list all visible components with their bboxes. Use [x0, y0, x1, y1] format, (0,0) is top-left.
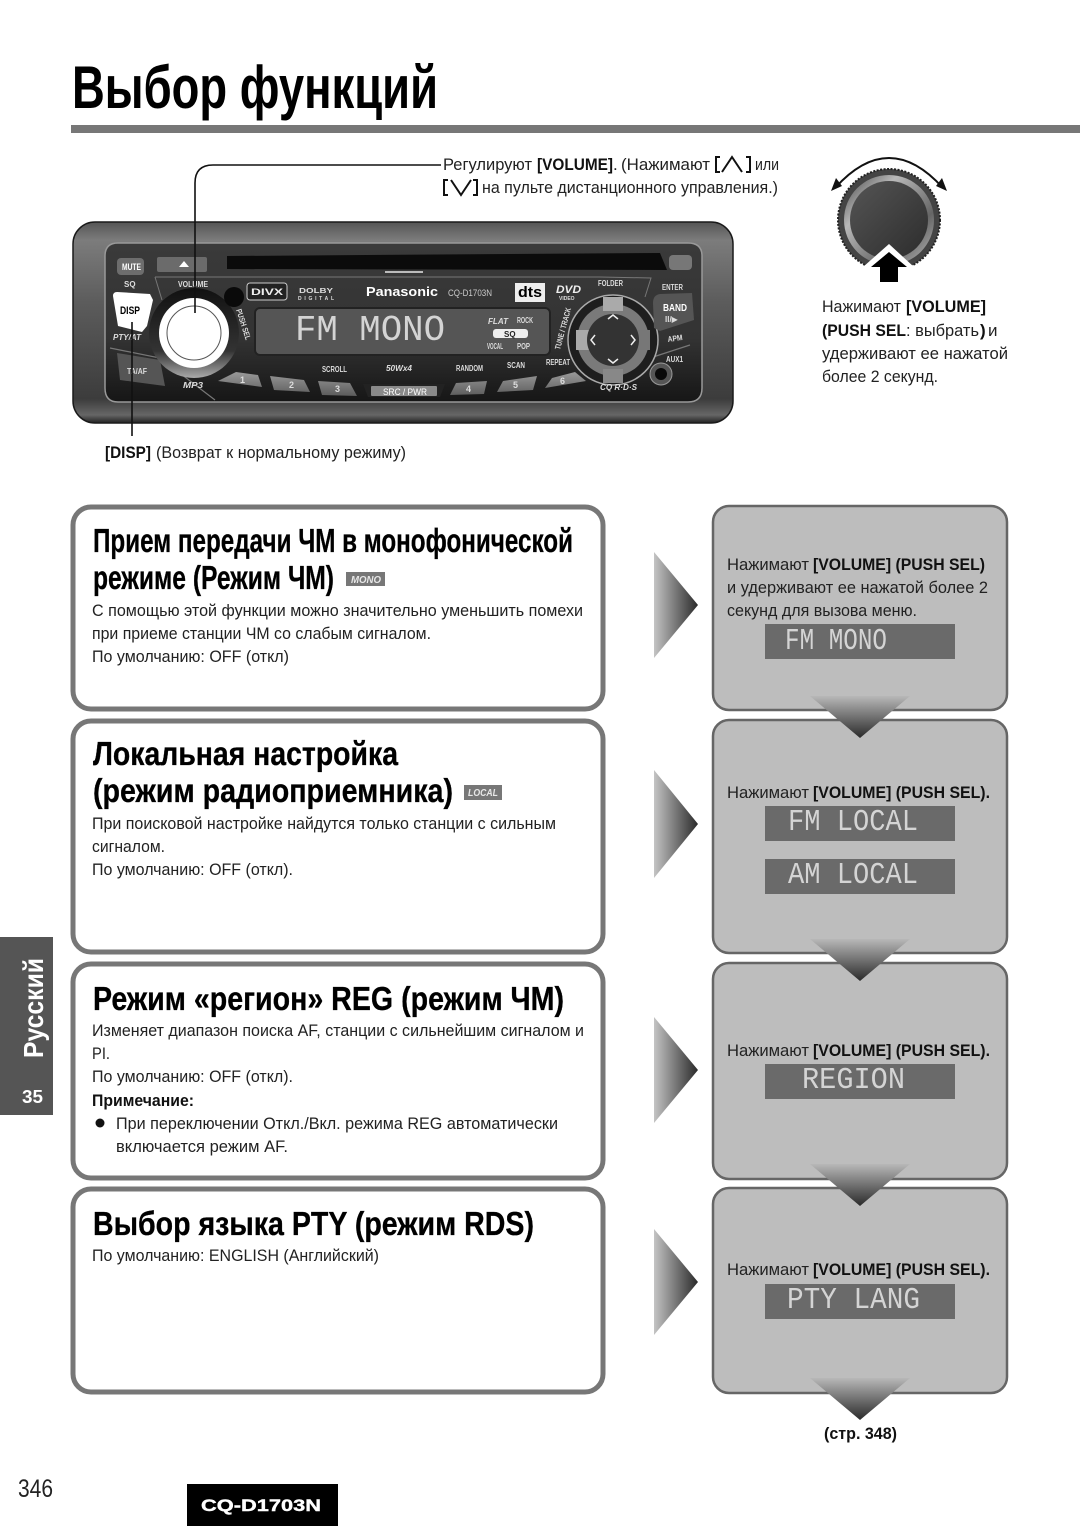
- panel: step 1: [713, 506, 1007, 710]
- heading: FM mono: Прием передачи ЧМ в монофонической: [93, 522, 573, 559]
- panel: FM mono: [73, 507, 603, 709]
- text: volume push select: Нажимают: [822, 297, 901, 316]
- car stereo faceplate: 1: [240, 375, 245, 385]
- note: Примечание:: [92, 1091, 194, 1110]
- car stereo faceplate: DIGITAL: [298, 296, 334, 302]
- panel: region mode: [73, 964, 603, 1178]
- car stereo faceplate: DOLBY: [299, 288, 333, 295]
- text: DISP caption: [DISP]: [105, 443, 151, 462]
- text: local mode description: [92, 814, 556, 879]
- display: PTY LANG: PTY LANG: [787, 1283, 920, 1318]
- text: step 2: [VOLUME] (PUSH SEL).: [813, 783, 990, 802]
- text: DISP caption: (Возврат к нормальному режиму): [156, 443, 406, 462]
- heading: FM mono: режиме (Режим ЧМ): [93, 559, 334, 596]
- car stereo faceplate: CQ-D1703N: [448, 288, 492, 298]
- display: REGION: REGION: [802, 1063, 905, 1098]
- text: local mode description: По умолчанию: OFF (откл).: [92, 860, 293, 879]
- text: step 3: [VOLUME] (PUSH SEL).: [813, 1041, 990, 1060]
- car stereo faceplate: TUNE / TRACK: [553, 306, 573, 351]
- display: REGION: [765, 1063, 955, 1099]
- display: FM MONO: [765, 624, 955, 659]
- car stereo faceplate: ENTER: [662, 283, 683, 292]
- car stereo faceplate: TA/AF: [127, 367, 147, 376]
- text: step 1: и удерживают ее нажатой более 2: [727, 578, 988, 597]
- panel: PTY language: [73, 1189, 603, 1392]
- car stereo faceplate: dts: [518, 284, 542, 301]
- text: local mode description: При поисковой настройке найдутся только станции с сильным: [92, 814, 556, 833]
- side tab: language: 35: [22, 1087, 43, 1107]
- car stereo faceplate: BAND: [663, 303, 687, 314]
- car stereo faceplate: SQ: [124, 280, 136, 289]
- car stereo faceplate: CQ R·D·S: [600, 383, 638, 392]
- text: volume push select: [822, 297, 1008, 386]
- text: volume push select: удерживают ее нажатой: [822, 344, 1008, 363]
- callout: volume control instruction: на пульте дистанционного управления.): [482, 178, 778, 197]
- car stereo faceplate: POP: [517, 342, 531, 351]
- car stereo faceplate: VOLUME: [178, 280, 209, 289]
- car stereo faceplate: PTY/AT: [113, 333, 142, 342]
- car stereo faceplate: SCROLL: [322, 365, 347, 374]
- arrow: right 3: [654, 1017, 698, 1123]
- heading: FM mono: [93, 522, 573, 596]
- leader line: DISP button: [131, 322, 133, 436]
- panel: local mode: [73, 721, 603, 952]
- panel: step 3: [713, 963, 1007, 1179]
- arrow: down 4: [810, 1378, 910, 1420]
- car stereo faceplate: PUSH SEL: [234, 308, 253, 341]
- text: step 1: [VOLUME] (PUSH SEL): [813, 555, 985, 574]
- car stereo faceplate: DISP: [120, 305, 140, 317]
- callout: volume control instruction: или: [755, 155, 779, 174]
- text: step 2: [727, 783, 990, 802]
- car stereo faceplate: Panasonic: [366, 284, 438, 299]
- footer: model badge: CQ-D1703N: [201, 1496, 321, 1515]
- panel: step 4: [713, 1188, 1007, 1393]
- car stereo faceplate: FM MONO: [295, 310, 445, 351]
- text: region mode description: [92, 1021, 584, 1086]
- car stereo faceplate: VOCAL: [487, 342, 503, 351]
- text: region mode description: По умолчанию: OFF (откл).: [92, 1067, 293, 1086]
- car stereo faceplate: SRC / PWR: [383, 387, 427, 397]
- side tab: language: Русский: [18, 958, 49, 1058]
- text: local mode description: сигналом.: [92, 837, 165, 856]
- icon: MONO badge: [346, 572, 385, 586]
- car stereo faceplate: [73, 222, 733, 423]
- car stereo faceplate: 2: [289, 380, 294, 390]
- car stereo faceplate: DIVX: [251, 287, 283, 297]
- text: volume push select: более 2 секунд.: [822, 367, 938, 386]
- text: FM mono description: С помощью этой функции можно значительно уменьшить помехи: [92, 601, 583, 620]
- icon: LOCAL badge: LOCAL: [468, 788, 498, 799]
- car stereo faceplate: SQ: [504, 330, 516, 339]
- car stereo faceplate: MP3: [183, 381, 204, 390]
- text: volume push select: [VOLUME]: [906, 297, 986, 316]
- icon: volume knob with rotation arrows: [831, 158, 947, 282]
- title: [71, 54, 1080, 133]
- car stereo faceplate: SCAN: [507, 361, 525, 370]
- car stereo faceplate: MUTE: [122, 262, 141, 272]
- text: volume push select: (PUSH SEL: [822, 321, 906, 340]
- text: region mode description: Изменяет диапазон поиска AF, станции с сильнейшим сигналом и: [92, 1021, 584, 1040]
- text: volume push select: : выбрать: [906, 321, 979, 340]
- callout: volume control instruction: [443, 155, 779, 197]
- footer: model badge: [187, 1484, 338, 1526]
- text: step 4: [727, 1260, 990, 1279]
- page number: 346: [18, 1475, 53, 1503]
- heading: local mode: [93, 735, 453, 809]
- text: step 2: Нажимают: [727, 783, 809, 802]
- callout: volume control instruction: [VOLUME]: [537, 155, 613, 174]
- text: step 4: Нажимают: [727, 1260, 809, 1279]
- arrow: right 2: [654, 770, 698, 878]
- car stereo faceplate: ROCK: [517, 316, 533, 325]
- display: FM LOCAL: FM LOCAL: [788, 805, 918, 840]
- icon: MONO badge: MONO: [351, 575, 381, 586]
- text: step 3: Нажимают: [727, 1041, 809, 1060]
- car stereo faceplate: REPEAT: [546, 358, 570, 367]
- text: step 1: Нажимают: [727, 555, 809, 574]
- icon: LOCAL badge: [464, 785, 502, 800]
- leader line: volume knob: [195, 165, 441, 313]
- title: Выбор функций: [72, 54, 438, 121]
- arrow: right 1: [654, 552, 698, 658]
- note: [92, 1091, 558, 1156]
- car stereo faceplate: FOLDER: [598, 279, 623, 288]
- car stereo faceplate: FLAT: [488, 317, 509, 326]
- car stereo faceplate: 3: [335, 384, 340, 394]
- text: region mode description: PI.: [92, 1044, 110, 1063]
- note: включается режим AF.: [116, 1137, 288, 1156]
- note: При переключении Откл./Вкл. режима REG автоматически: [116, 1114, 558, 1133]
- text: step 1: [727, 555, 988, 620]
- callout: volume control instruction: (Нажимают: [621, 155, 710, 174]
- side tab: language: [0, 937, 53, 1115]
- arrow: down 1: [810, 696, 910, 738]
- panel: step 2: [713, 720, 1007, 953]
- car stereo faceplate: APM: [667, 333, 683, 344]
- car stereo faceplate: 6: [560, 376, 565, 386]
- display: FM MONO: FM MONO: [785, 624, 887, 659]
- text: page reference: (стр. 348): [824, 1424, 897, 1443]
- heading: region mode: Режим «регион» REG (режим ЧМ): [93, 980, 564, 1017]
- car stereo faceplate: II/▶: [665, 315, 679, 324]
- heading: local mode: Локальная настройка: [93, 735, 399, 772]
- car stereo faceplate: 5: [513, 380, 518, 390]
- text: FM mono description: По умолчанию: OFF (откл): [92, 647, 289, 666]
- text: FM mono description: [92, 601, 583, 666]
- callout: volume control instruction: .: [613, 155, 618, 174]
- text: step 1: секунд для вызова меню.: [727, 601, 917, 620]
- text: volume push select: и: [988, 321, 998, 340]
- arrow: right 4: [654, 1229, 698, 1335]
- arrow: down 3: [810, 1164, 910, 1206]
- car stereo faceplate: DVD: [556, 284, 581, 296]
- display: AM LOCAL: AM LOCAL: [788, 858, 918, 893]
- arrow: down 2: [810, 939, 910, 981]
- callout: volume control instruction: Регулируют: [443, 155, 532, 174]
- text: PTY language default: По умолчанию: ENGLISH (Английский): [92, 1246, 379, 1265]
- text: step 4: [VOLUME] (PUSH SEL).: [813, 1260, 990, 1279]
- text: FM mono description: при приеме станции ЧМ со слабым сигналом.: [92, 624, 431, 643]
- text: step 3: [727, 1041, 990, 1060]
- car stereo faceplate: VIDEO: [559, 296, 575, 302]
- car stereo faceplate: 50Wx4: [386, 364, 413, 373]
- heading: local mode: (режим радиоприемника): [93, 772, 453, 809]
- text: volume push select: ): [980, 321, 986, 340]
- heading: PTY language: Выбор языка PTY (режим RDS): [93, 1205, 534, 1242]
- car stereo faceplate: 4: [466, 384, 471, 394]
- car stereo faceplate: AUX1: [666, 355, 683, 364]
- car stereo faceplate: RANDOM: [456, 364, 483, 373]
